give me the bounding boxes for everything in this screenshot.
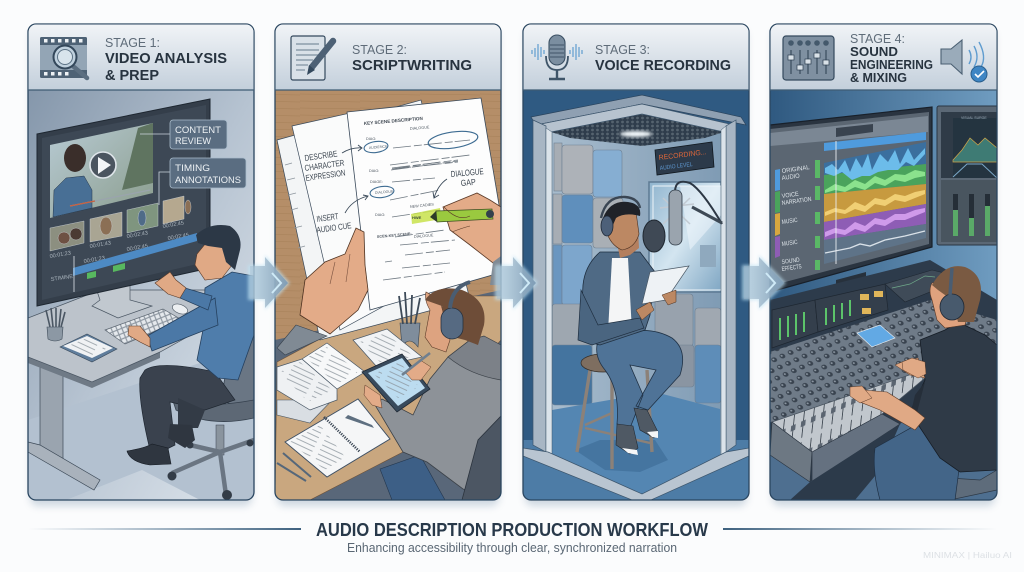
header: stage 1 <box>28 24 254 90</box>
header: stage 4 <box>770 24 997 90</box>
callout: content review: CONTENT <box>175 125 221 135</box>
spiral notebook <box>285 399 390 477</box>
callout: timing annotations: TIMING <box>175 163 210 173</box>
panel: stage 4 sound engineering and mixing <box>770 90 1003 500</box>
handwritten notes: INSERT <box>316 211 340 224</box>
front paper: DIAG: <box>366 137 376 141</box>
subtitle: Enhancing accessibility through clear, synchronized narration <box>347 540 677 555</box>
front paper: AUDIENCE <box>369 144 388 150</box>
secondary monitor with analyser and meters <box>937 106 1003 245</box>
ceiling light <box>620 131 652 137</box>
header: stage 3 <box>523 24 749 90</box>
office chair <box>168 323 254 500</box>
pencil cup <box>46 308 65 341</box>
front paper: KEY SCENE DESCRIPTION <box>364 116 424 126</box>
heading: stage 1 label: VIDEO ANALYSIS <box>105 51 227 67</box>
heading: stage 1 label <box>105 35 227 84</box>
timecodes: 00:02:43 <box>126 230 148 240</box>
handwritten notes: CHARACTER <box>304 158 345 173</box>
recording sign <box>655 142 714 175</box>
track labels: VOICE <box>781 191 799 200</box>
front paper: NEW CADIES <box>410 202 434 209</box>
timecodes: 00:02:45 <box>162 220 184 230</box>
track labels: AUDIO <box>781 173 800 182</box>
highlighter marks <box>411 208 442 224</box>
booth back wall <box>550 115 722 495</box>
booth floor <box>549 392 720 494</box>
arrow: stage 2 to stage 3 <box>495 255 538 310</box>
arrow: stage 3 to stage 4 <box>742 255 786 310</box>
front paper: DIALOGUE <box>410 125 430 131</box>
annotation arrows <box>342 145 447 213</box>
footer rule right <box>723 528 997 530</box>
track labels: NARRATION <box>781 196 812 207</box>
timecodes <box>49 220 189 283</box>
heading: stage 3 label <box>595 42 731 74</box>
heading: stage 3 label: VOICE RECORDING <box>595 58 731 74</box>
panel shadows <box>30 30 995 506</box>
paper text lines <box>383 140 470 280</box>
footer rule left <box>28 528 301 530</box>
timeline bar <box>73 233 197 276</box>
front paper: HWE <box>412 215 422 220</box>
person at computer <box>127 225 254 465</box>
heading: stage 4 label: & MIXING <box>850 70 907 85</box>
handwritten notes: DIALOGUE <box>450 166 484 179</box>
pencil cup <box>399 292 420 347</box>
heading: stage 2 label: SCRIPTWRITING <box>352 58 472 74</box>
channel colour strips <box>775 169 780 191</box>
timecodes: 00:01:23 <box>83 255 105 265</box>
outside floor <box>523 440 749 500</box>
handwritten notes: AUDIO CUE <box>316 220 352 235</box>
track labels <box>781 164 812 273</box>
front paper: DIALOGUE <box>414 233 434 239</box>
track labels: SOUND <box>781 256 801 266</box>
hand holding highlighter <box>430 193 501 285</box>
heading: stage 3 label: STAGE 3: <box>595 42 650 57</box>
front paper: SCEN-KEY SCENE: <box>377 232 412 239</box>
heading: stage 2 label <box>352 42 472 74</box>
foam wall panels <box>552 143 721 405</box>
front paper: DIAG: <box>369 169 379 173</box>
timecodes: 00:01:43 <box>89 240 111 250</box>
handwritten notes <box>304 148 484 235</box>
pen circles <box>363 140 389 154</box>
hand holding paper <box>277 228 368 355</box>
icon: microphone with sound waves <box>532 35 582 79</box>
callout: content review: REVIEW <box>175 136 211 146</box>
desk leg and foot <box>28 365 100 490</box>
header: stage 2 <box>275 24 501 90</box>
back paper <box>277 100 470 340</box>
heading: stage 4 label: ENGINEERING <box>850 57 933 72</box>
window <box>649 182 721 292</box>
callout: timing annotations <box>170 158 246 188</box>
panel: stage 1 video analysis and prep <box>28 90 254 515</box>
sticky notes stack <box>353 329 422 367</box>
icon: mixer <box>783 36 834 80</box>
playhead <box>835 141 837 264</box>
front paper: DIAG: <box>375 213 385 217</box>
booth frame <box>523 95 749 504</box>
heading: stage 4 label <box>850 31 933 85</box>
keyboard <box>105 309 182 344</box>
desk surface <box>275 296 501 500</box>
audio tracks <box>824 142 926 264</box>
icon: film strip with magnifier <box>40 37 87 78</box>
desk top <box>28 290 204 388</box>
timecodes: 00:02:45 <box>167 232 189 242</box>
lower floor <box>770 380 997 500</box>
timecodes: 00:02:45 <box>126 243 148 253</box>
timecodes: 00:01:23 <box>49 250 71 260</box>
pens on desk <box>277 453 311 481</box>
track labels: MUSIC <box>781 239 799 248</box>
main monitor with DAW tracks <box>770 107 932 292</box>
floor shading <box>58 363 254 500</box>
floor under desk <box>275 290 501 500</box>
mixing console <box>770 260 997 500</box>
booth ceiling foam <box>551 114 724 146</box>
main monitor stand <box>836 272 866 302</box>
icon: document and pen <box>291 36 333 80</box>
panel borders <box>28 24 997 500</box>
callout: timing annotations: ANNOTATIONS <box>175 175 241 185</box>
open books stack <box>277 343 365 423</box>
video thumbnails <box>50 196 191 251</box>
panel: stage 3 voice recording <box>523 90 749 504</box>
icon: speaker with check badge <box>941 40 987 82</box>
watermark: MINIMAX | Hailuo AI <box>923 551 1012 560</box>
recording sign: RECORDING... <box>658 147 707 162</box>
track labels: ORIGINAL <box>781 164 811 175</box>
stool <box>577 354 652 469</box>
monitor stand <box>91 286 153 318</box>
front paper <box>347 98 510 310</box>
heading: stage 2 label: STAGE 2: <box>352 42 407 57</box>
middle paper <box>292 113 395 330</box>
notepad <box>60 334 117 362</box>
front paper: DIAGE: <box>370 180 383 184</box>
callout: content review <box>170 120 227 149</box>
heading: stage 1 label: & PREP <box>105 68 159 84</box>
video frame with play button <box>50 123 153 218</box>
callout connector lines <box>140 134 170 205</box>
heading: stage 4 label: STAGE 4: <box>850 31 905 46</box>
timecodes: STIMINE <box>50 274 74 283</box>
studio microphone <box>643 182 722 252</box>
handwritten notes: EXPRESSION <box>305 168 346 183</box>
handwritten notes: DESCRIBE <box>304 148 338 163</box>
office chair <box>905 370 997 500</box>
person writing on tablet <box>362 282 501 500</box>
person reading script <box>578 197 689 455</box>
track labels: MUSIC <box>781 217 799 226</box>
recording sign: AUDIO LEVEL <box>660 162 694 172</box>
front paper: DIALOGUE <box>375 189 394 195</box>
mouse <box>172 304 188 314</box>
title: AUDIO DESCRIPTION PRODUCTION WORKFLOW <box>316 520 708 540</box>
track labels: EFFECTS <box>781 263 802 273</box>
sound engineer <box>850 266 997 500</box>
panel: stage 2 scriptwriting <box>275 90 510 500</box>
heading: stage 1 label: STAGE 1: <box>105 35 160 50</box>
back paper text lines <box>285 163 305 248</box>
handwritten notes: GAP <box>460 177 476 188</box>
heading: stage 4 label: SOUND <box>850 44 898 59</box>
secondary monitor with analyser and meters: VISUAL SURGE <box>961 116 987 120</box>
arrow: stage 1 to stage 2 <box>248 255 290 310</box>
monitor <box>37 99 210 306</box>
